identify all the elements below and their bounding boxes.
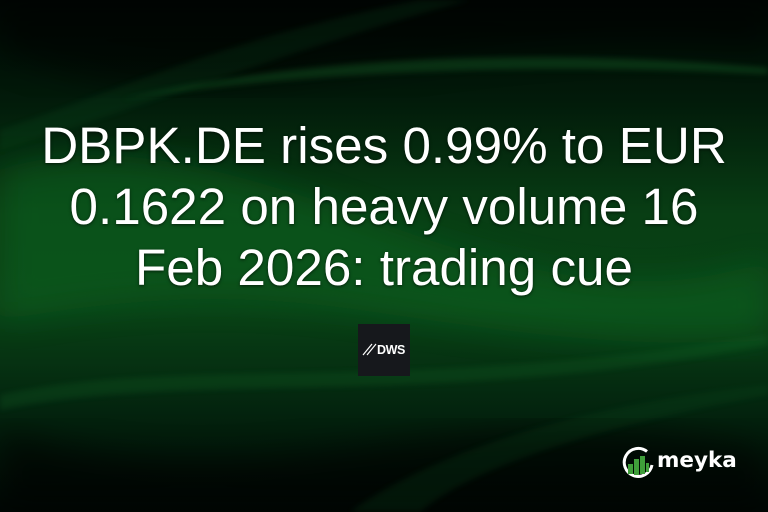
- title: 0.1622 on heavy volume 16: [70, 178, 698, 235]
- brand name: meyka: [657, 448, 737, 473]
- icon: DWS logo: DWS: [377, 343, 405, 357]
- title: Feb 2026: trading cue: [135, 239, 633, 296]
- icon: DWS logo: [358, 324, 410, 376]
- title: DBPK.DE rises 0.99% to EUR: [41, 117, 727, 174]
- icon: meyka chart ring: [622, 446, 654, 478]
- brand: meyka logo: [622, 446, 737, 478]
- title: [41, 117, 727, 298]
